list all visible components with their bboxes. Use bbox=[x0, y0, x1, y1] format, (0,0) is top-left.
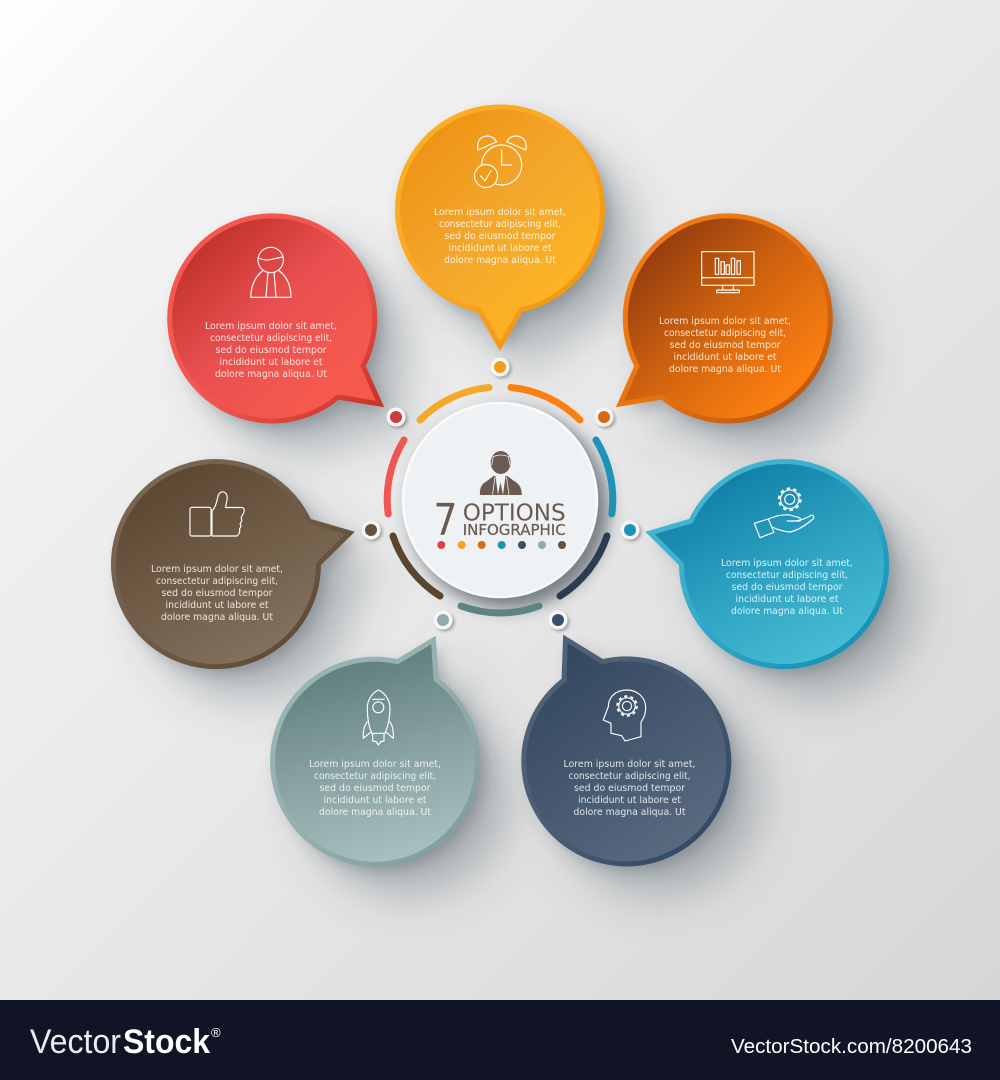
text block: incididunt ut labore et bbox=[578, 795, 681, 806]
colour legend dots bbox=[437, 541, 566, 549]
text block: Lorem ipsum dolor sit amet, bbox=[721, 558, 853, 569]
navy speech bubble bbox=[524, 639, 729, 864]
yellow speech bubble bbox=[398, 107, 602, 346]
text block: Lorem ipsum dolor sit amet, bbox=[151, 564, 283, 575]
centre disc bbox=[403, 403, 597, 597]
text block bbox=[434, 207, 566, 266]
text block: sed do eiusmod tempor bbox=[574, 783, 685, 794]
text block: sed do eiusmod tempor bbox=[162, 588, 273, 599]
text block: dolore magna aliqua. Ut bbox=[161, 612, 273, 623]
text block: incididunt ut labore et bbox=[736, 594, 839, 605]
orange speech bubble bbox=[620, 216, 830, 421]
central disc shadow bbox=[409, 409, 609, 609]
footer logo: ® bbox=[211, 1025, 221, 1040]
text block bbox=[205, 321, 337, 380]
red speech bubble bbox=[170, 216, 380, 421]
text block: consectetur adipiscing elit, bbox=[568, 771, 690, 782]
text block: Lorem ipsum dolor sit amet, bbox=[309, 759, 441, 770]
segmented ring bbox=[387, 388, 613, 613]
text block: dolore magna aliqua. Ut bbox=[319, 807, 431, 818]
icon: head with gear bbox=[603, 690, 646, 741]
footer logo: Stock bbox=[123, 1023, 210, 1061]
heading: INFOGRAPHIC bbox=[463, 521, 566, 539]
text block: consectetur adipiscing elit, bbox=[314, 771, 436, 782]
text block: consectetur adipiscing elit, bbox=[439, 219, 561, 230]
icon: monitor with bars bbox=[702, 252, 754, 293]
icon: rocket bbox=[363, 690, 393, 745]
soft shadows bbox=[122, 115, 918, 895]
panel: yellow option bbox=[398, 107, 602, 346]
text block: incididunt ut labore et bbox=[448, 243, 552, 254]
text block: dolore magna aliqua. Ut bbox=[669, 364, 781, 375]
text block: Lorem ipsum dolor sit amet, bbox=[434, 207, 566, 218]
text block: Lorem ipsum dolor sit amet, bbox=[205, 321, 337, 332]
heading: 7 bbox=[434, 495, 458, 546]
icon: thumbs up bbox=[190, 492, 244, 536]
text block: sed do eiusmod tempor bbox=[444, 231, 556, 242]
icon: hand holding gear bbox=[754, 488, 814, 538]
footer bar bbox=[0, 1000, 1000, 1080]
panel: brown option bbox=[114, 462, 350, 667]
icon: businessman bbox=[480, 451, 522, 495]
text block bbox=[659, 316, 791, 375]
text block: dolore magna aliqua. Ut bbox=[215, 369, 327, 380]
text block: sed do eiusmod tempor bbox=[732, 582, 843, 593]
footer logo bbox=[30, 1023, 221, 1061]
text block: incididunt ut labore et bbox=[674, 352, 777, 363]
text block: incididunt ut labore et bbox=[220, 357, 323, 368]
panel: centre hub bbox=[403, 403, 597, 597]
text block bbox=[564, 759, 696, 818]
panel: orange option bbox=[620, 216, 830, 421]
text block: incididunt ut labore et bbox=[324, 795, 427, 806]
heading: OPTIONS bbox=[463, 498, 566, 526]
heading bbox=[434, 495, 566, 546]
panel: grey-teal option bbox=[273, 640, 478, 864]
panel: navy option bbox=[524, 639, 729, 864]
text block: consectetur adipiscing elit, bbox=[726, 570, 848, 581]
brown speech bubble bbox=[114, 462, 350, 667]
footer id: VectorStock.com/8200643 bbox=[731, 1036, 972, 1058]
text block: dolore magna aliqua. Ut bbox=[444, 255, 556, 266]
text block: consectetur adipiscing elit, bbox=[210, 333, 332, 344]
text block: sed do eiusmod tempor bbox=[320, 783, 431, 794]
text block: Lorem ipsum dolor sit amet, bbox=[659, 316, 791, 327]
text block bbox=[309, 759, 441, 818]
text block bbox=[721, 558, 853, 617]
text block: consectetur adipiscing elit, bbox=[156, 576, 278, 587]
blue speech bubble bbox=[650, 462, 886, 667]
grey-teal speech bubble bbox=[273, 640, 478, 864]
icon: person with tie bbox=[251, 247, 291, 297]
text block: incididunt ut labore et bbox=[166, 600, 269, 611]
text block: dolore magna aliqua. Ut bbox=[731, 606, 843, 617]
panel: red option bbox=[170, 216, 380, 421]
panel: blue option bbox=[650, 462, 886, 667]
icon: alarm clock bbox=[474, 136, 526, 188]
text block: dolore magna aliqua. Ut bbox=[574, 807, 686, 818]
text block: Lorem ipsum dolor sit amet, bbox=[564, 759, 696, 770]
text block: consectetur adipiscing elit, bbox=[664, 328, 786, 339]
footer logo: Vector bbox=[30, 1023, 121, 1061]
text block bbox=[151, 564, 283, 623]
connector dots bbox=[362, 358, 640, 630]
text block: sed do eiusmod tempor bbox=[216, 345, 327, 356]
text block: sed do eiusmod tempor bbox=[670, 340, 781, 351]
